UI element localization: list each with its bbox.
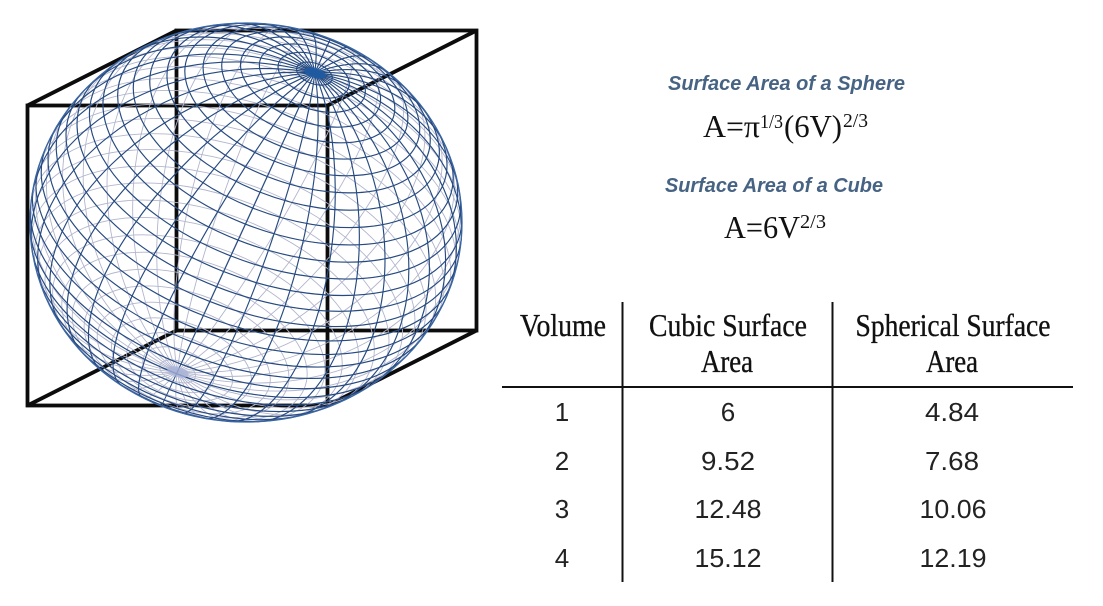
table row: volume 2: 9.52	[701, 446, 755, 476]
table header: spherical surface area	[856, 307, 1050, 379]
back parallels	[0, 0, 529, 484]
table row: volume 1: 4.84	[925, 397, 979, 427]
wireframe sphere	[0, 0, 597, 542]
formula: sphere: 2/3	[843, 110, 868, 132]
table row: volume 2: 7.68	[925, 446, 979, 476]
table header: spherical surface area: Spherical Surface	[856, 307, 1050, 343]
formula: sphere: A=π	[703, 108, 760, 144]
bottom pole convergence	[166, 364, 190, 380]
sphere outline	[30, 23, 462, 422]
heading: surface area of a sphere: Surface Area of a Sphere	[668, 73, 905, 95]
front meridians	[0, 0, 597, 504]
table header: cubic surface area	[649, 307, 807, 379]
table header: cubic surface area: Cubic Surface	[649, 307, 807, 343]
table header: volume: Volume	[520, 307, 606, 343]
table row: volume 4: 15.12	[694, 543, 762, 573]
table header: cubic surface area: Area	[701, 343, 753, 379]
table row: volume 3	[555, 494, 986, 524]
table row: volume 1	[555, 397, 979, 427]
formula: sphere: 1/3	[760, 111, 783, 133]
table row: volume 1: 1	[555, 397, 569, 427]
front parallels	[0, 0, 529, 483]
table row: volume 4: 12.19	[920, 543, 986, 573]
formula: sphere	[703, 108, 868, 144]
table row: volume 4: 4	[555, 543, 569, 573]
table row: volume 3: 12.48	[694, 494, 762, 524]
table row: volume 1: 6	[721, 397, 735, 427]
formula: cube: A=6V	[724, 209, 800, 245]
top pole convergence	[303, 65, 327, 81]
table row: volume 3: 10.06	[920, 494, 986, 524]
heading: surface area of a cube: Surface Area of a Cube	[665, 175, 883, 197]
back meridians	[0, 0, 580, 542]
formula: sphere: (6V)	[784, 108, 842, 144]
formula: cube: 2/3	[800, 211, 826, 233]
table row: volume 2: 2	[555, 446, 569, 476]
table row: volume 4	[555, 543, 986, 573]
data table	[502, 302, 1073, 582]
table header: spherical surface area: Area	[926, 343, 978, 379]
table row: volume 2	[555, 446, 979, 476]
table row: volume 3: 3	[555, 494, 569, 524]
cube wireframe	[28, 30, 476, 406]
illustration: cube around wireframe sphere	[0, 0, 597, 542]
